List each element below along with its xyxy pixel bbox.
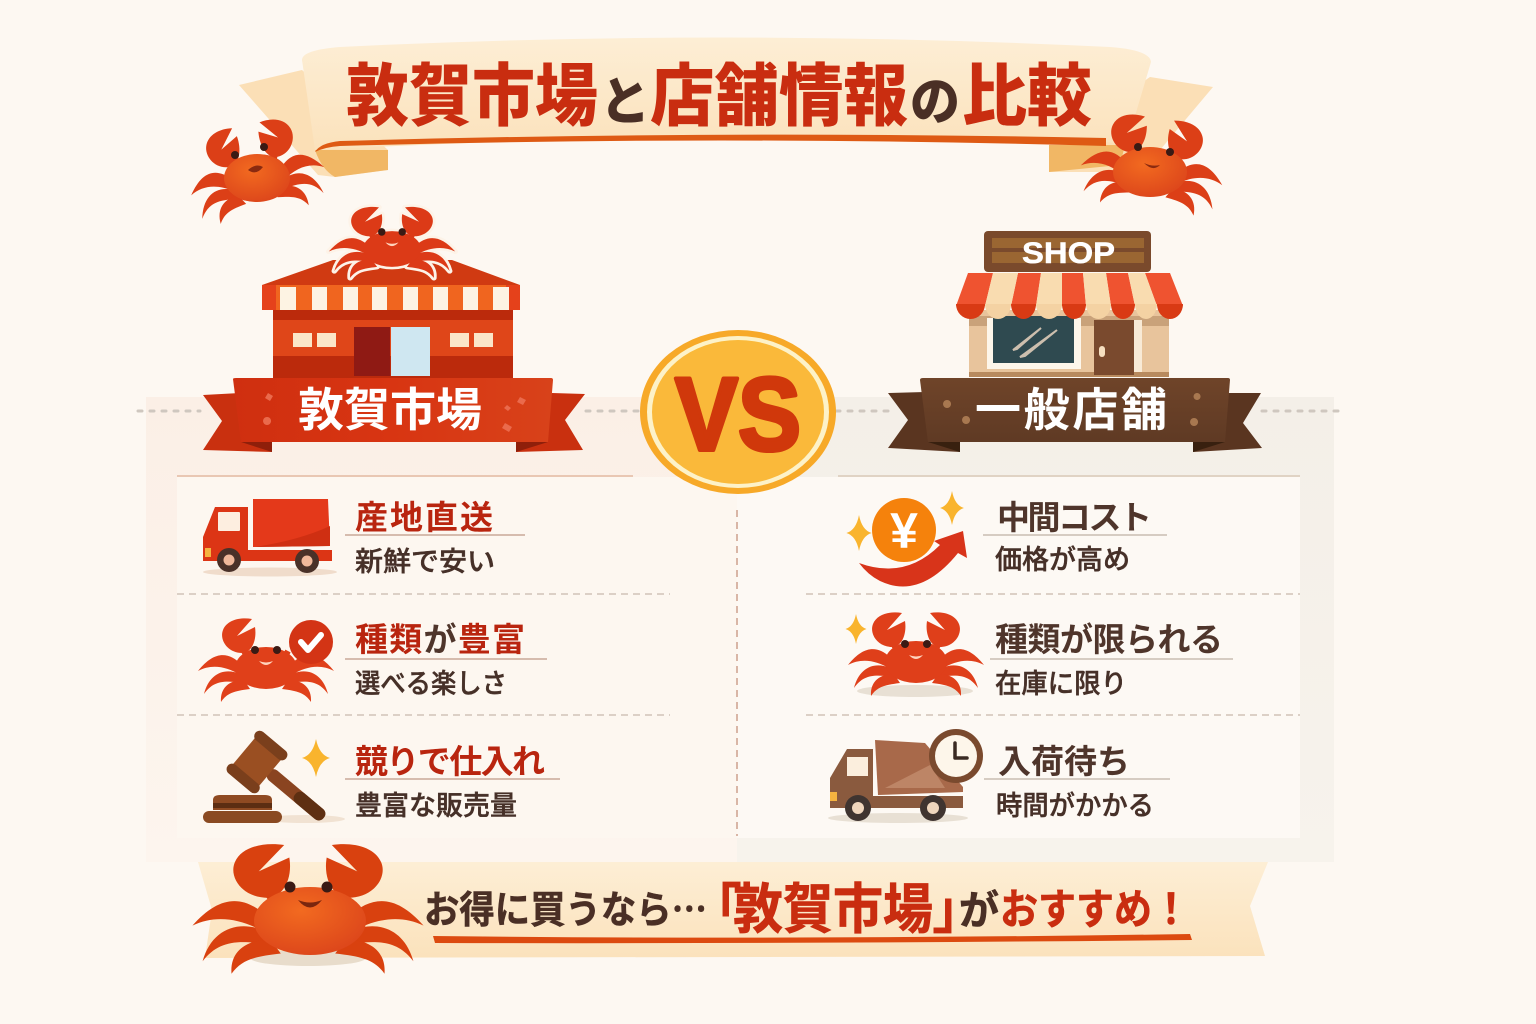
text: 種類が豊富: 種類が豊富	[355, 621, 525, 658]
title text: 店舗情報	[650, 59, 908, 135]
recommendation text: 」	[932, 880, 986, 940]
text: 新鮮で安い: 新鮮で安い	[355, 547, 495, 577]
text: 豊富な販売量: 豊富な販売量	[355, 791, 517, 821]
row: 種類が豊富	[198, 618, 547, 702]
underline	[433, 934, 1192, 943]
text: 競りで仕入れ: 競りで仕入れ	[355, 743, 545, 780]
title text: の	[910, 74, 960, 132]
crab: bottom mascot	[192, 844, 424, 974]
icon: yen coin with rising arrow	[846, 491, 967, 586]
row: 競りで仕入れ	[203, 728, 560, 839]
icon: yen coin with rising arrow: ¥	[890, 503, 918, 559]
recommendation text: 敦賀市場	[733, 880, 933, 940]
title text: 敦賀市場	[346, 59, 598, 135]
row: 種類が限られる	[846, 612, 1233, 699]
recommendation text: お得に買うなら…	[424, 879, 707, 934]
title text: 比較	[962, 59, 1092, 135]
icon: gavel	[203, 728, 345, 839]
crab: top right	[1076, 108, 1230, 219]
crab on roof	[329, 207, 455, 278]
icon: crab with check	[198, 618, 334, 702]
text: 時間がかかる: 時間がかかる	[996, 791, 1154, 821]
text: 価格が高め: 価格が高め	[995, 545, 1130, 575]
text: 種類が限られる: 種類が限られる	[995, 621, 1223, 658]
recommendation text	[424, 879, 1190, 940]
comparison panel	[138, 397, 1340, 862]
title text: と	[600, 74, 650, 132]
text: 産地直送: 産地直送	[355, 499, 493, 536]
bottom recommendation banner	[192, 844, 1268, 974]
icon: shop storefront	[956, 231, 1183, 377]
shop sign	[984, 231, 1151, 272]
icon: red truck	[203, 499, 337, 576]
awning	[956, 273, 1183, 319]
ribbon: 敦賀市場	[203, 378, 585, 452]
recommendation text: おすすめ！	[1000, 886, 1190, 933]
text: 中間コスト: 中間コスト	[997, 499, 1152, 536]
row: 産地直送	[203, 499, 525, 577]
recommendation text: が	[959, 889, 999, 933]
ribbon: 敦賀市場: 敦賀市場	[298, 384, 482, 436]
ribbon: 一般店舗	[888, 378, 1262, 452]
recommendation text: 「	[688, 880, 742, 940]
icon: market building	[262, 207, 520, 380]
VS badge	[640, 330, 836, 494]
row: 入荷待ち	[828, 729, 1170, 823]
text: 在庫に限り: 在庫に限り	[995, 669, 1127, 699]
text: 選べる楽しさ: 選べる楽しさ	[355, 669, 507, 699]
icon: crab with sparkle	[846, 612, 984, 697]
VS badge: VS	[675, 357, 801, 473]
title text	[346, 59, 1092, 135]
title banner	[239, 38, 1213, 177]
icon: brown truck with clock	[828, 729, 983, 823]
text: 入荷待ち: 入荷待ち	[998, 743, 1130, 780]
row: 中間コスト	[846, 491, 1167, 586]
shop sign: SHOP	[1022, 237, 1115, 270]
ribbon: 一般店舗: 一般店舗	[975, 384, 1167, 436]
crab: top left	[179, 111, 331, 229]
